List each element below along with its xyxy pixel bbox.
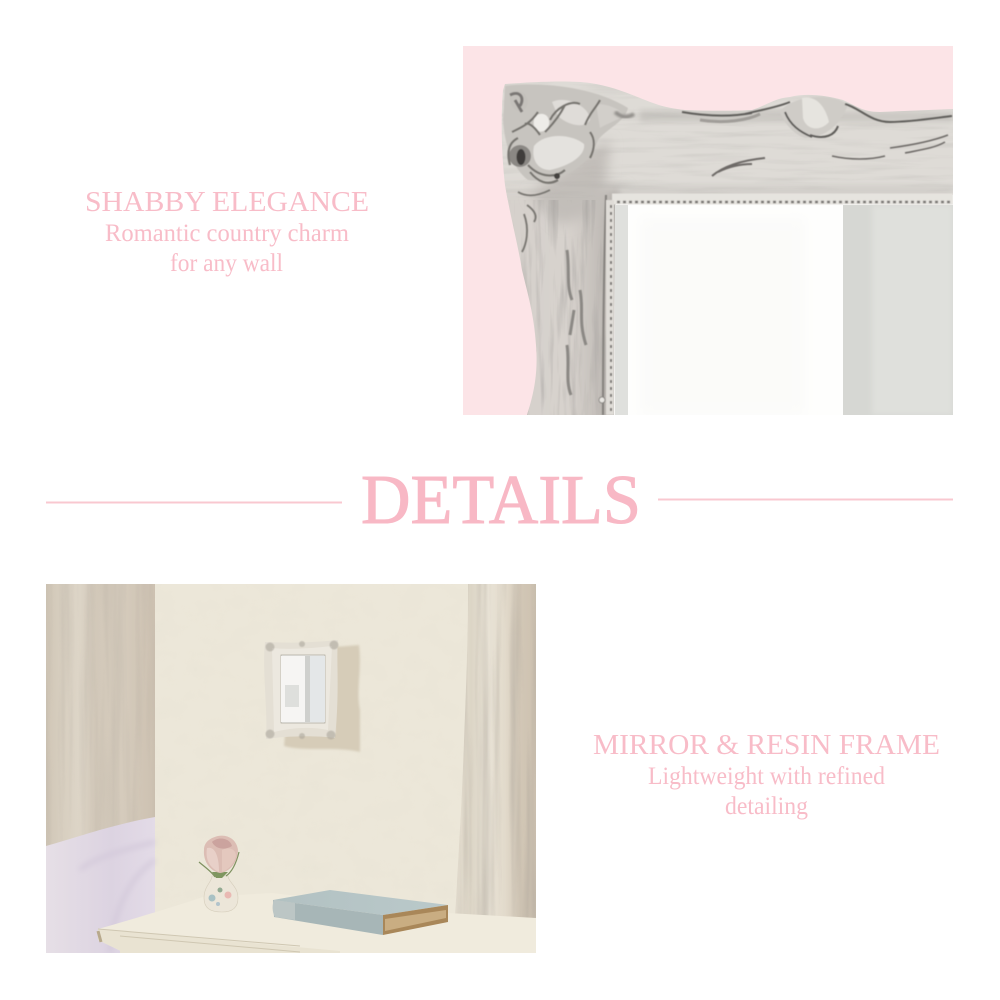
heading: mirror and resin frame: MIRROR & RESIN FRAME: [593, 730, 940, 761]
ornate frame body: [502, 82, 953, 415]
text block: shabby elegance: [85, 187, 369, 277]
photo panel: mirror frame close-up: [463, 46, 955, 438]
wall plaster texture: [155, 584, 475, 914]
left curtain: [46, 584, 155, 849]
distress marks: [526, 135, 948, 415]
right curtain: [455, 584, 536, 920]
mirror shadow: [284, 645, 360, 752]
body: for any wall: for any wall: [170, 250, 283, 277]
body: lightweight with refined: Lightweight with refined: [648, 763, 885, 790]
body: romantic country charm: Romantic country charm: [105, 220, 350, 247]
mirror glass reflection: [610, 195, 953, 415]
top edge shell ornament: [682, 97, 952, 138]
beaded inner rim: [599, 199, 953, 415]
book: [273, 890, 448, 935]
right divider: [658, 498, 953, 500]
back wall: [155, 584, 468, 914]
vase with rose: [199, 836, 239, 912]
frame shading: [530, 140, 610, 225]
body: detailing: detailing: [725, 793, 808, 820]
left divider: [46, 502, 342, 504]
heading: shabby elegance: SHABBY ELEGANCE: [85, 187, 369, 218]
photo panel: room scene: [46, 584, 536, 953]
corner rose ornament: [503, 84, 634, 252]
table: [96, 912, 536, 953]
lilac blanket: [46, 817, 155, 953]
miniature mirror: [264, 640, 338, 740]
title: details: DETAILS: [361, 462, 641, 539]
text block: mirror and resin frame: [593, 730, 940, 820]
